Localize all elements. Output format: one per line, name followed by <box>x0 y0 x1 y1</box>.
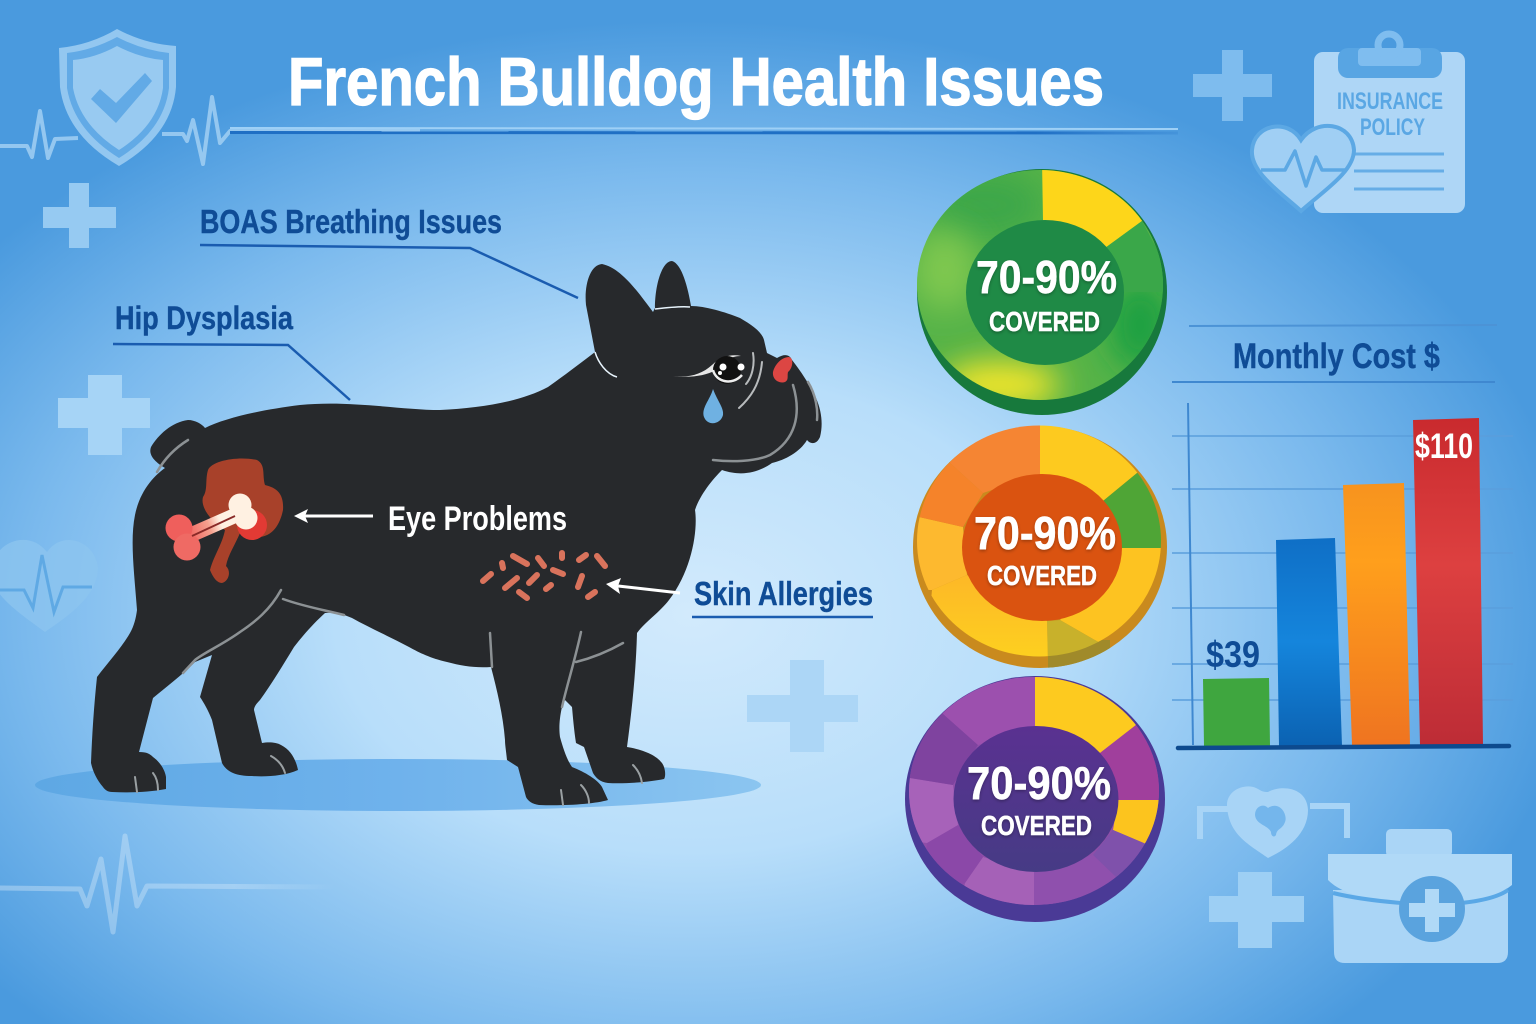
policy text: INSURANCE <box>1337 88 1443 115</box>
hip injury <box>166 458 283 583</box>
icon: heart with pulse <box>1252 126 1354 211</box>
donut text: COVERED <box>987 560 1097 591</box>
callout: skin allergies <box>606 575 873 617</box>
title underline <box>230 128 1178 133</box>
callout: BOAS <box>200 203 578 298</box>
inflamed joint <box>203 458 283 583</box>
callout: eye problems <box>294 500 567 538</box>
icon: medical case <box>1328 829 1512 963</box>
icon: insurance policy clipboard <box>1252 34 1465 213</box>
callout: hip dysplasia: Hip Dysplasia <box>115 300 293 336</box>
icon: cross top right <box>1193 50 1272 121</box>
callout: skin allergies: Skin Allergies <box>694 575 873 612</box>
callout: eye problems: Eye Problems <box>388 500 567 538</box>
tear drop <box>703 389 723 423</box>
icon: heart left <box>0 540 98 632</box>
callout: BOAS: BOAS Breathing Issues <box>200 203 502 240</box>
bar: red <box>1413 418 1483 745</box>
callout: hip dysplasia <box>113 300 350 400</box>
icon: cross centre <box>747 660 858 752</box>
dog body <box>91 261 822 805</box>
ground shadow <box>35 759 761 811</box>
icon: cross top left <box>43 183 116 248</box>
donut: orange <box>905 420 1170 670</box>
donut: purple <box>900 670 1170 922</box>
sad eye <box>673 353 762 408</box>
dog highlights <box>595 307 690 377</box>
donut text: 70-90% <box>974 507 1116 559</box>
heartbeat line: top <box>0 97 420 164</box>
value: $110: $110 <box>1415 427 1473 466</box>
policy text: POLICY <box>1360 114 1425 141</box>
dog silhouette <box>91 261 822 805</box>
icon: shield with checkmark <box>59 29 176 166</box>
title: French Bulldog Health Issues <box>288 44 1104 120</box>
icon: cross middle left <box>58 375 150 455</box>
toe lines <box>135 756 642 805</box>
icon: heart with brackets <box>1200 786 1347 858</box>
skin rash marks <box>483 553 605 598</box>
bar chart: monthly cost <box>1172 325 1513 748</box>
donut text <box>974 507 1116 591</box>
bone <box>166 494 267 560</box>
donut text: COVERED <box>981 810 1092 841</box>
donut text <box>976 251 1117 337</box>
chart title: Monthly Cost $ <box>1233 337 1440 376</box>
nose <box>773 357 792 383</box>
donut text: COVERED <box>989 306 1100 337</box>
bar: blue <box>1276 538 1342 746</box>
value: $39: $39 <box>1206 634 1260 675</box>
heartbeat line: bottom left <box>0 836 333 932</box>
donut text <box>967 757 1111 841</box>
bar: $39 <box>1203 678 1270 746</box>
donut text: 70-90% <box>976 251 1117 303</box>
donut: green <box>917 169 1167 415</box>
policy text <box>1337 88 1443 141</box>
icon: cross bottom right <box>1209 872 1304 948</box>
donut text: 70-90% <box>967 757 1111 809</box>
policy lines <box>1354 154 1444 189</box>
bar: orange <box>1343 483 1410 745</box>
